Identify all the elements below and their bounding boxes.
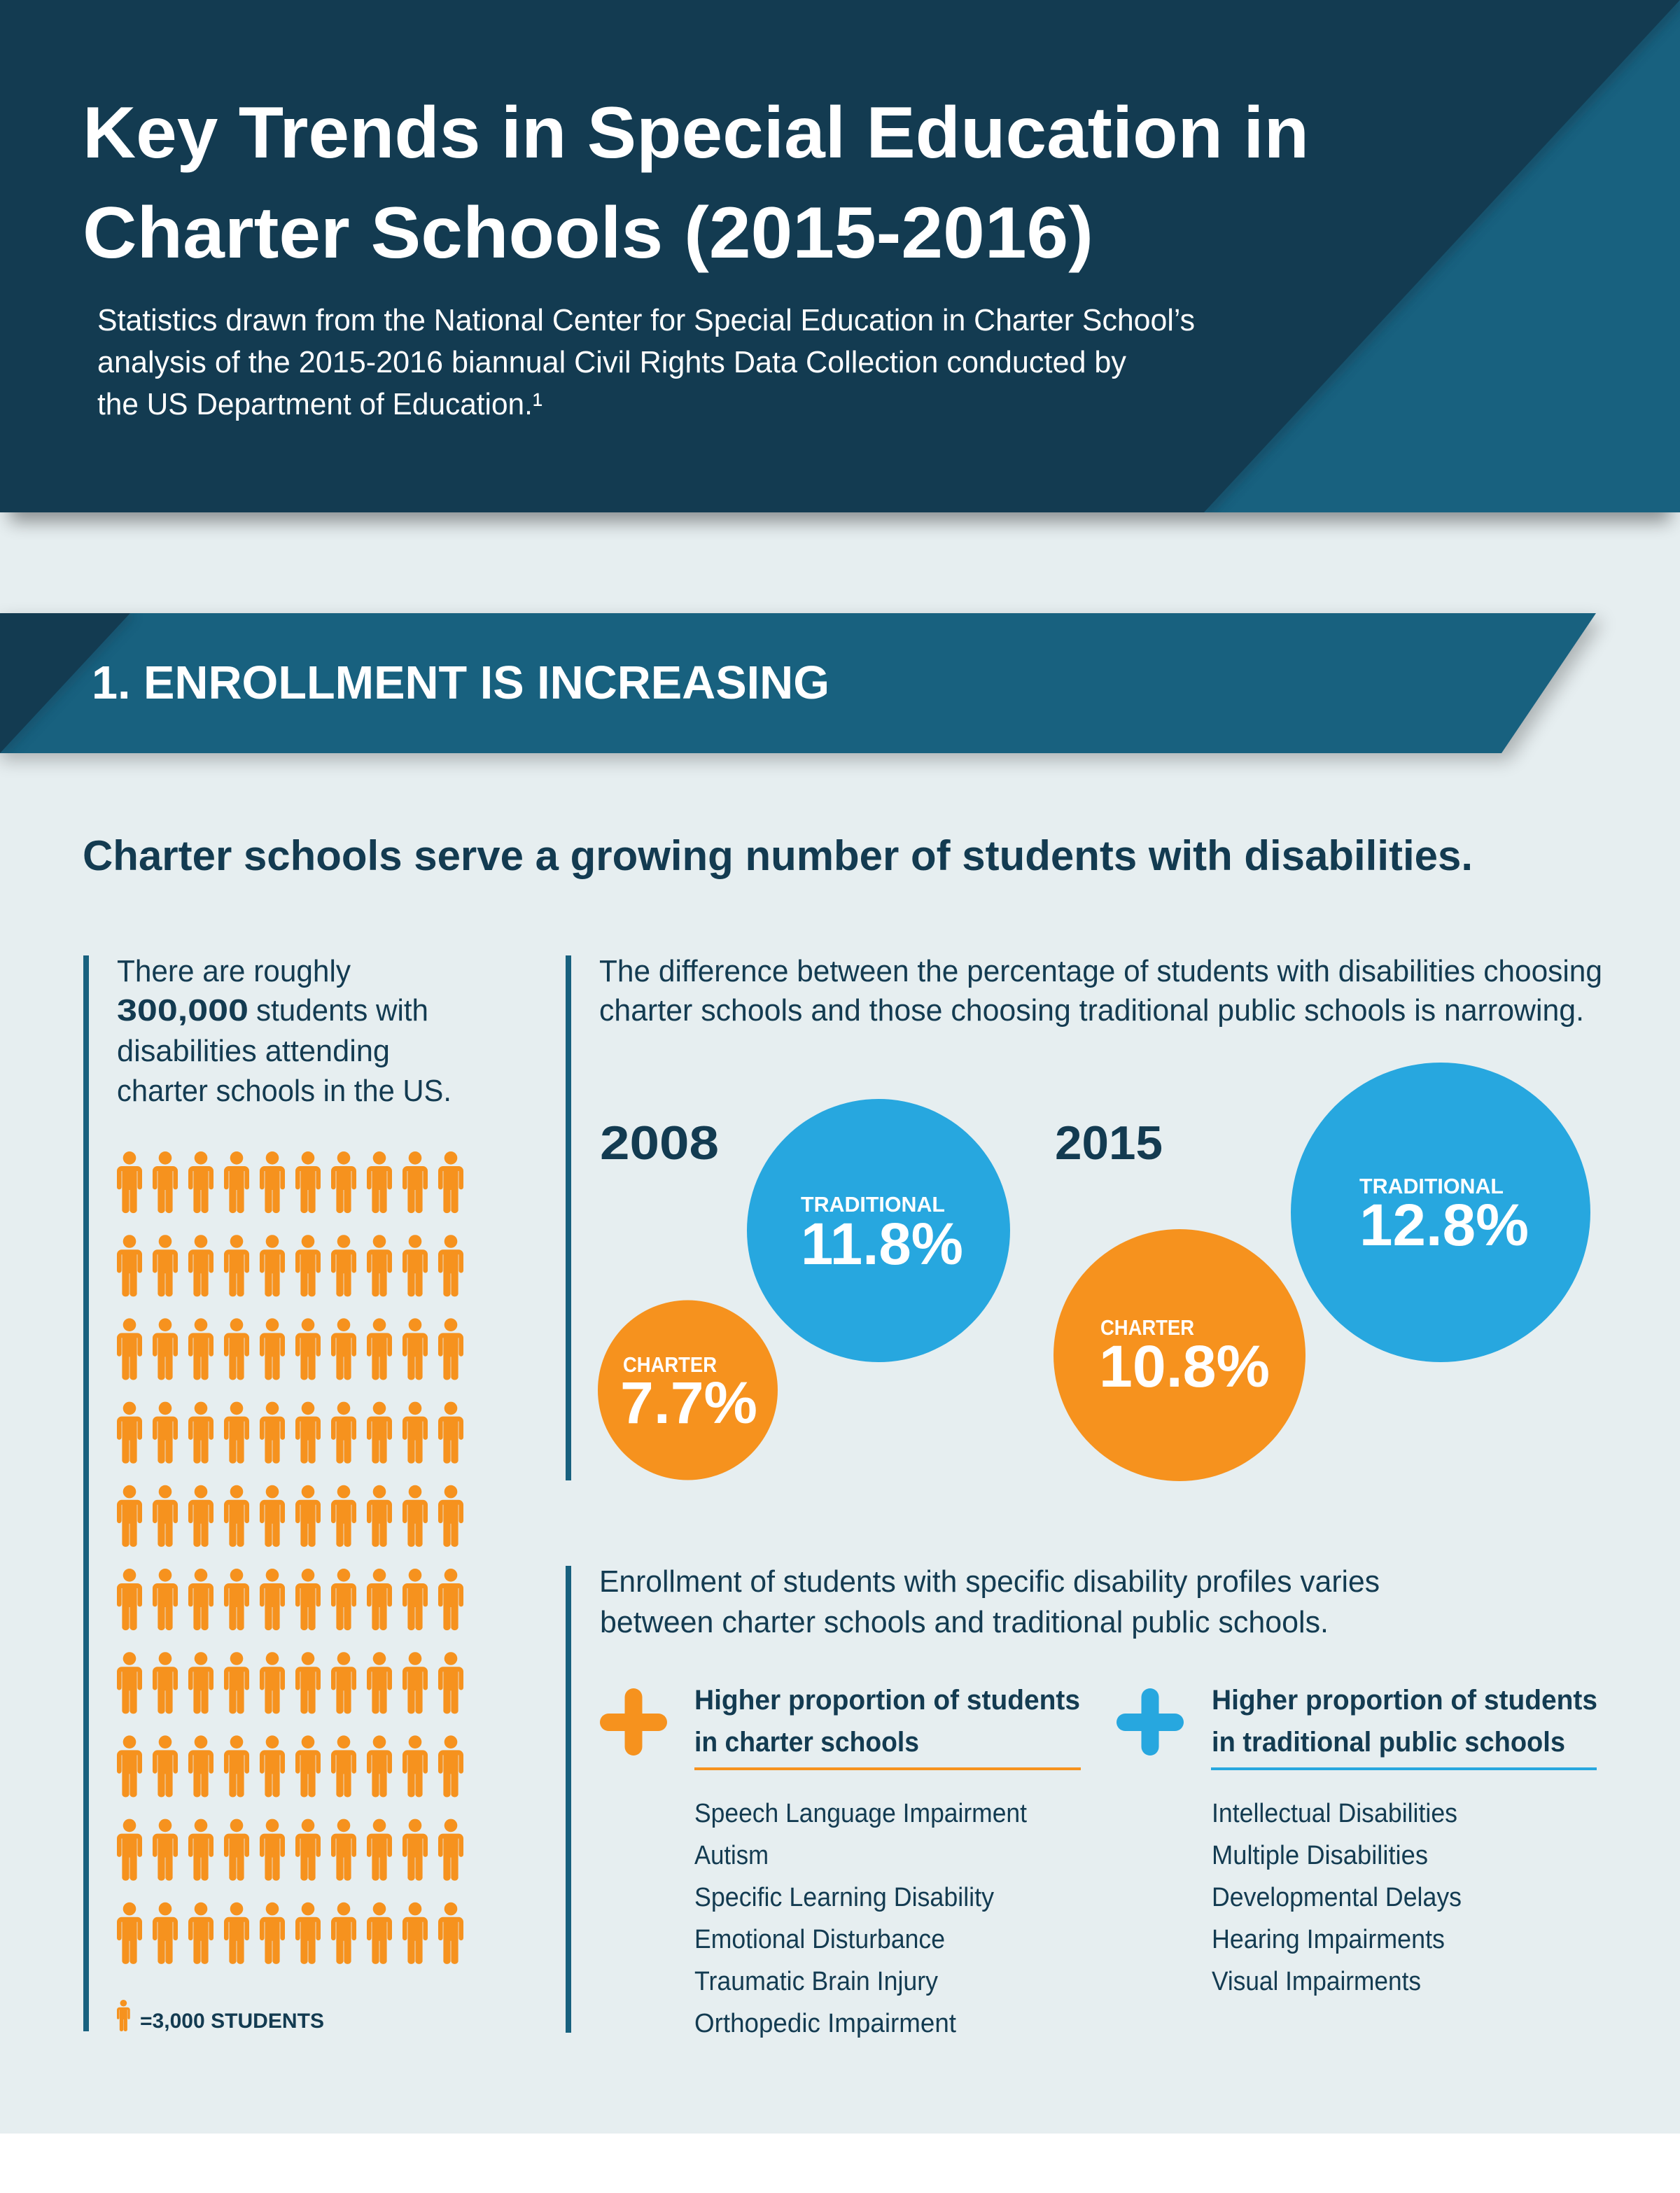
banner heading: 1. ENROLLMENT IS INCREASING — [92, 657, 830, 709]
header subtitle — [97, 303, 1195, 421]
bubble: traditional 2015: 12.8% — [1359, 1192, 1529, 1258]
header panel — [0, 0, 1680, 521]
charter column heading: Higher proportion of students — [694, 1685, 1080, 1716]
charter list: Traumatic Brain Injury — [694, 1967, 938, 1996]
bubble: traditional 2008: 11.8% — [801, 1211, 963, 1277]
bubble: charter 2015: CHARTER — [1100, 1315, 1194, 1340]
bubble: charter 2008: CHARTER — [623, 1352, 717, 1377]
left paragraph: disabilities attending — [117, 1034, 390, 1068]
header subtitle: the US Department of Education.¹ — [97, 387, 542, 421]
comparison paragraph: charter schools and those choosing traditional public schools is narrowing. — [599, 993, 1584, 1028]
charter list: Specific Learning Disability — [694, 1883, 994, 1912]
panel: percentage comparison — [566, 954, 1602, 1481]
panel: disability profiles — [566, 1564, 1597, 2038]
section headline: Charter schools serve a growing number of students with disabilities. — [83, 832, 1473, 879]
left paragraph: charter schools in the US. — [117, 1074, 451, 1108]
bubble: charter 2015: 10.8% — [1099, 1333, 1270, 1399]
bubble: traditional 2008 — [747, 1099, 1010, 1362]
header subtitle: analysis of the 2015-2016 biannual Civil Rights Data Collection conducted by — [97, 345, 1126, 379]
column: charter schools — [600, 1685, 1081, 2038]
icon: blue plus — [1116, 1688, 1184, 1756]
bubble: charter 2008 — [598, 1301, 778, 1480]
panel: left column with 300,000 students — [83, 954, 463, 2033]
bubble: traditional 2008: TRADITIONAL — [801, 1192, 945, 1217]
left paragraph: 300,000 — [117, 993, 248, 1028]
charter list: Speech Language Impairment — [694, 1799, 1027, 1828]
traditional list: Hearing Impairments — [1212, 1925, 1445, 1954]
title: Key Trends in Special Education in — [83, 92, 1309, 174]
traditional list — [1212, 1799, 1462, 1996]
title: Charter Schools (2015-2016) — [83, 192, 1093, 274]
profiles paragraph: between charter schools and traditional public schools. — [600, 1605, 1329, 1639]
charter list: Autism — [694, 1841, 769, 1870]
icon: orange plus — [600, 1688, 667, 1756]
section banner — [0, 613, 1603, 760]
traditional list: Intellectual Disabilities — [1212, 1799, 1457, 1828]
charter list — [694, 1799, 1027, 2038]
bubble: traditional 2015: TRADITIONAL — [1359, 1174, 1504, 1198]
charter column heading: in charter schools — [694, 1727, 919, 1758]
charter list: Orthopedic Impairment — [694, 2009, 956, 2038]
traditional column heading: in traditional public schools — [1212, 1727, 1565, 1758]
bubble: traditional 2015 — [1291, 1063, 1590, 1362]
traditional column heading — [1212, 1685, 1597, 1758]
bubble: charter 2008: 7.7% — [620, 1370, 757, 1436]
pictogram legend — [117, 2000, 324, 2033]
profiles paragraph — [599, 1564, 1380, 1639]
year label 2015: 2015 — [1055, 1116, 1163, 1170]
traditional list: Visual Impairments — [1212, 1967, 1421, 1996]
charter list: Emotional Disturbance — [694, 1925, 945, 1954]
left paragraph: There are roughly — [117, 954, 351, 988]
left paragraph: students with — [256, 993, 428, 1028]
traditional list: Developmental Delays — [1212, 1883, 1462, 1912]
bubble: charter 2015 — [1054, 1229, 1306, 1481]
header subtitle: Statistics drawn from the National Center for Special Education in Charter School’s — [97, 303, 1195, 337]
traditional column heading: Higher proportion of students — [1212, 1685, 1597, 1716]
comparison paragraph — [599, 954, 1602, 1028]
column: traditional public schools — [1116, 1685, 1597, 1996]
comparison paragraph: The difference between the percentage of students with disabilities choosing — [599, 954, 1602, 988]
title — [83, 92, 1309, 274]
charter column heading — [694, 1685, 1080, 1758]
pictogram legend: =3,000 STUDENTS — [140, 2010, 324, 2033]
profiles paragraph: Enrollment of students with specific disability profiles varies — [599, 1564, 1380, 1599]
year label 2008: 2008 — [600, 1116, 719, 1170]
traditional list: Multiple Disabilities — [1212, 1841, 1428, 1870]
pictogram: 100 people — [117, 1151, 463, 1964]
left paragraph — [117, 954, 451, 1108]
